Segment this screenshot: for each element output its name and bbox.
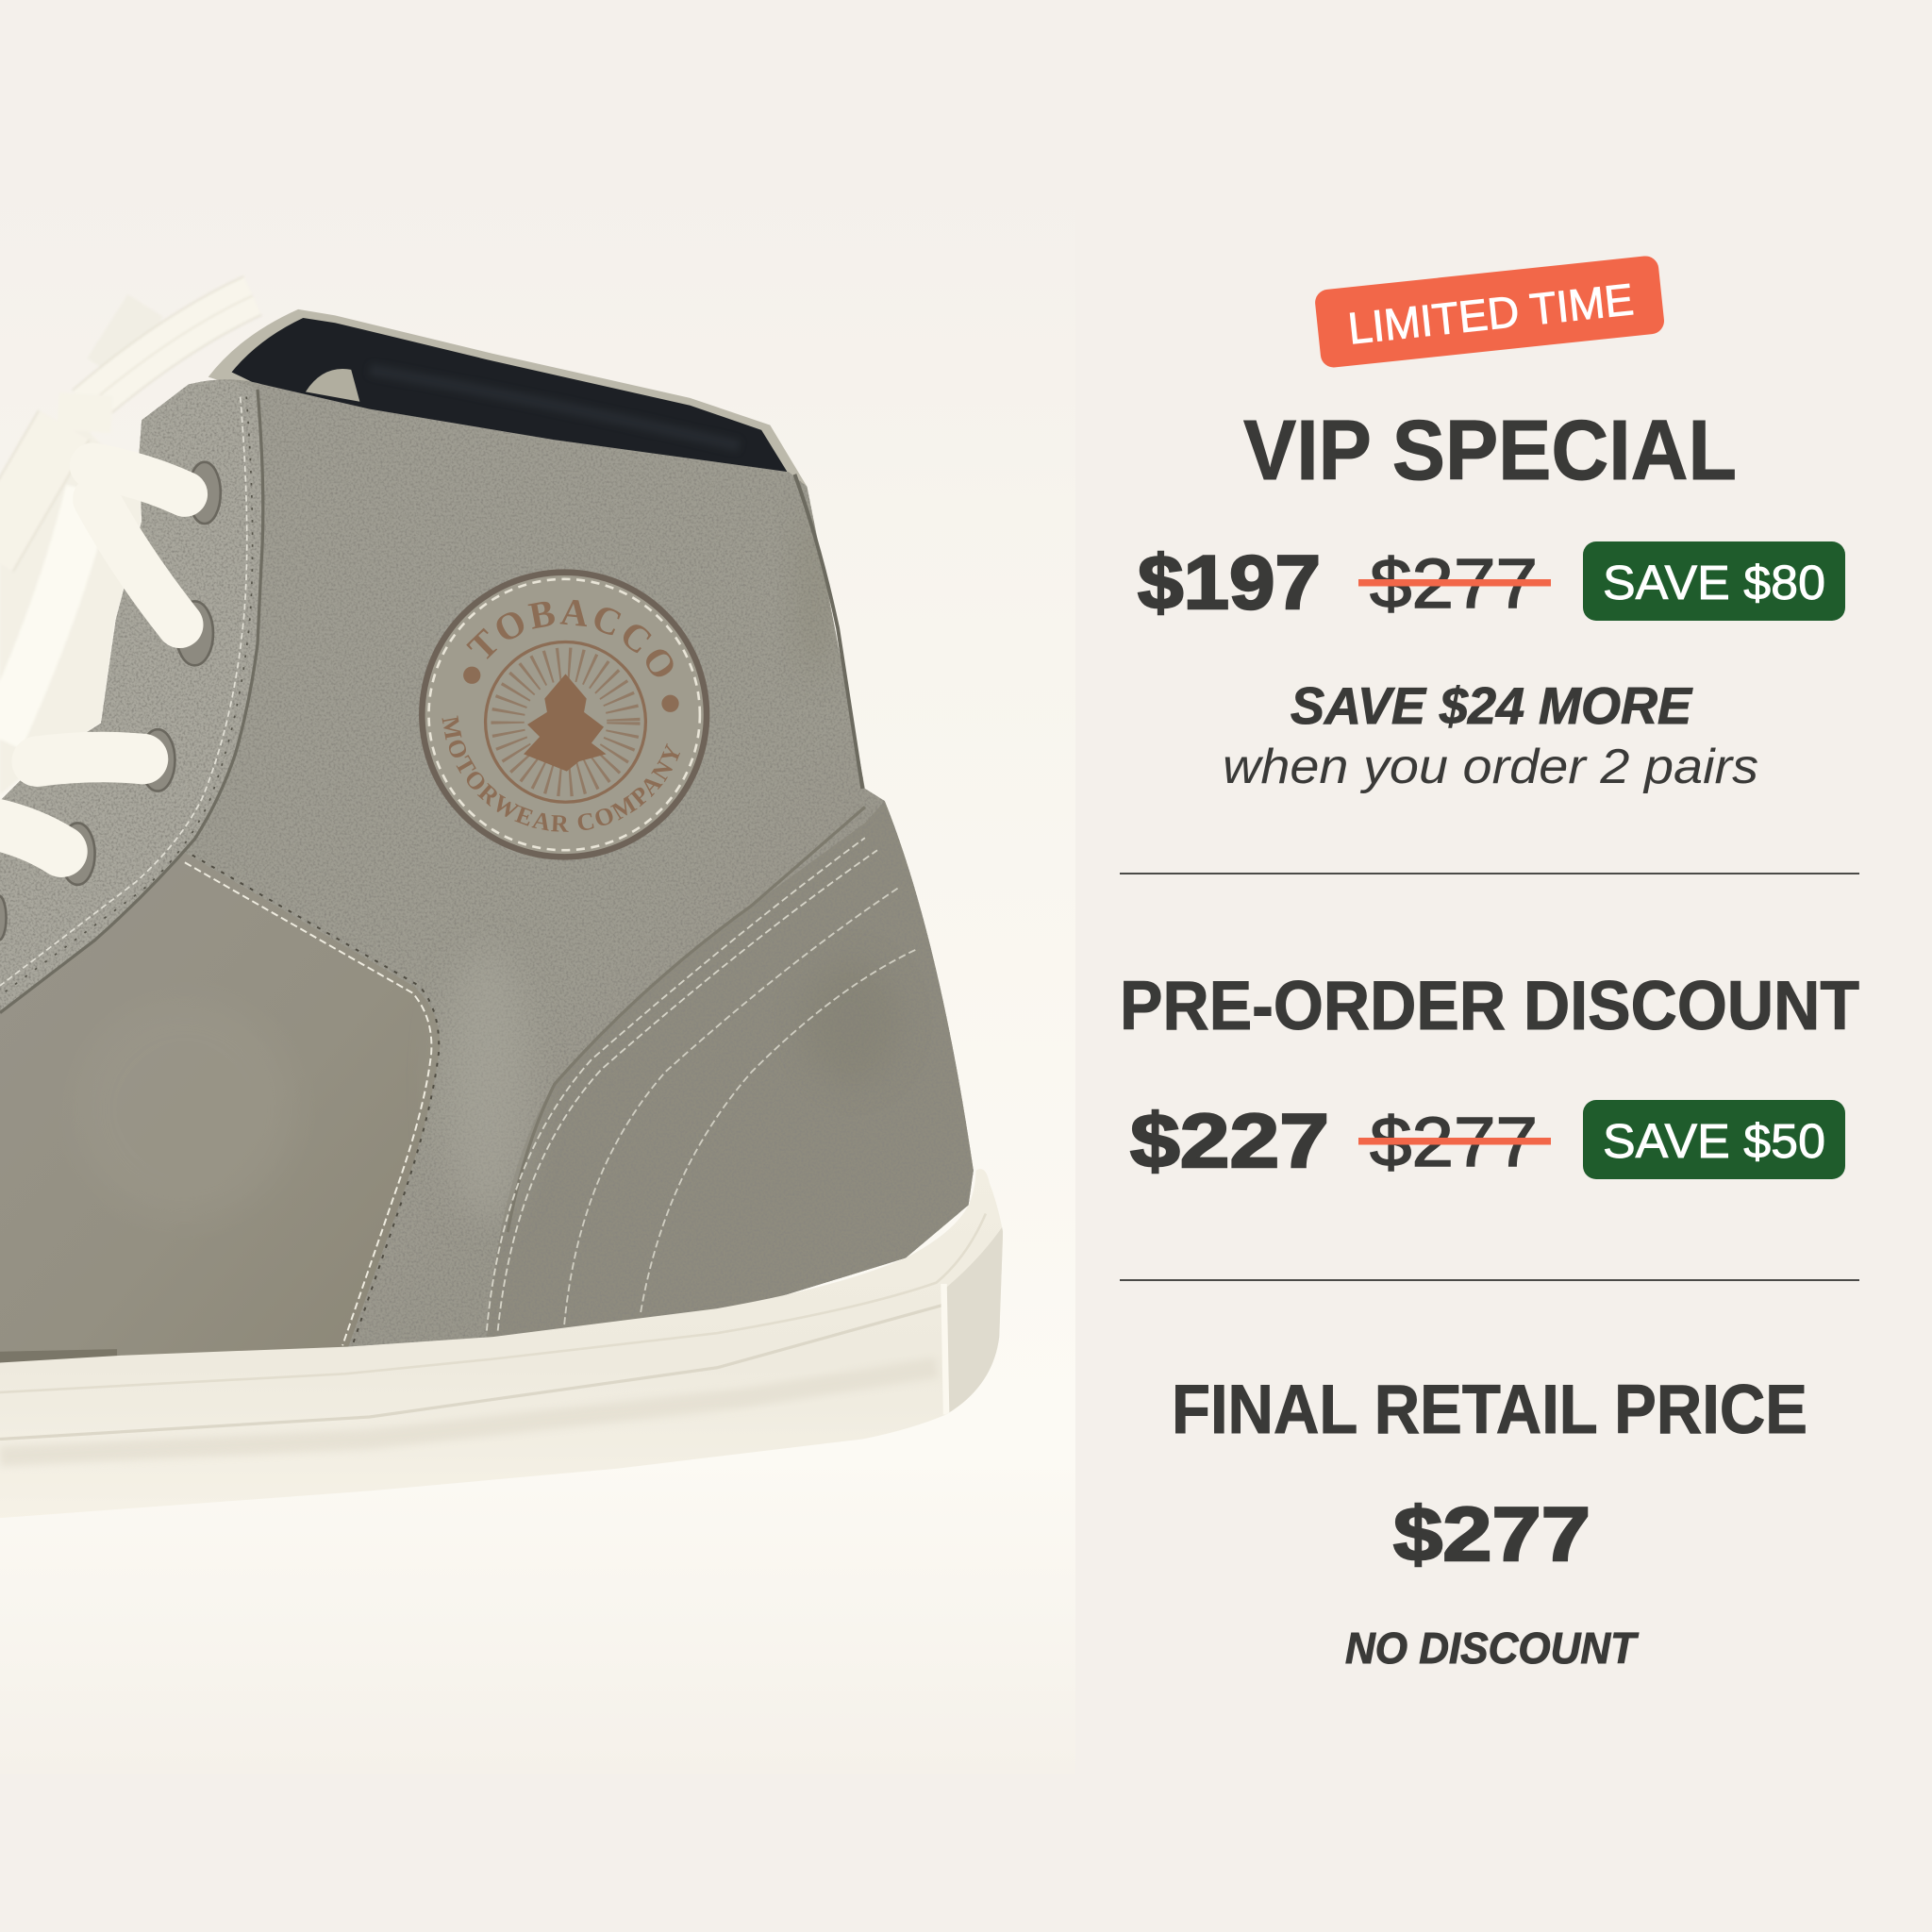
- note: multi-pair saving: SAVE $24 MORE: [1291, 676, 1693, 735]
- price: 197: $197: [1138, 541, 1321, 625]
- note: no discount: NO DISCOUNT: [1345, 1624, 1640, 1673]
- toe panel: [0, 853, 440, 1363]
- patch lettering: TOBACCO: [466, 600, 674, 677]
- eyelets: [0, 462, 221, 941]
- badge: limited time: [1314, 255, 1665, 369]
- price: 277: $277: [1393, 1492, 1591, 1577]
- laces behind the collar: [0, 295, 253, 794]
- laces through eyelets: [0, 466, 185, 852]
- old price with strike: $277: [1370, 1103, 1538, 1181]
- save 50 badge: [1583, 1100, 1845, 1179]
- tier: VIP special: [1138, 404, 1845, 794]
- heading: VIP special: VIP SPECIAL: [1243, 404, 1737, 498]
- suede upper: [0, 379, 974, 1370]
- save 80 badge: [1583, 541, 1845, 621]
- save 50 badge: SAVE $50: [1603, 1114, 1825, 1168]
- heel counter: [487, 801, 974, 1341]
- badge: limited time: LIMITED TIME: [1345, 274, 1636, 354]
- leather brand patch: [419, 569, 709, 860]
- product photo: sneaker: [0, 275, 1003, 1518]
- note: multi-pair saving: when you order 2 pairs: [1223, 740, 1758, 794]
- infographic canvas: [0, 257, 1859, 1664]
- patch lettering: MOTORWEAR COMPANY: [441, 715, 680, 832]
- photo backdrop: [0, 160, 1075, 1774]
- old price with strike: $277: [1370, 544, 1538, 623]
- heading: final retail: FINAL RETAIL PRICE: [1172, 1372, 1807, 1448]
- note: multi-pair saving: [1223, 676, 1758, 794]
- collar lining: [208, 309, 807, 487]
- price: 227: $227: [1130, 1099, 1329, 1184]
- tier: pre-order discount: [1120, 968, 1859, 1184]
- patch lettering: [441, 600, 680, 832]
- seams and stitching: [0, 390, 918, 1345]
- tier: final retail price: [1172, 1372, 1807, 1673]
- sole: [0, 1158, 1023, 1528]
- soft shading: [0, 506, 899, 1366]
- save 80 badge: SAVE $80: [1603, 556, 1825, 609]
- heading: pre-order: PRE-ORDER DISCOUNT: [1120, 968, 1859, 1044]
- eyelet panel: [0, 380, 263, 1013]
- patch emblem: [486, 641, 645, 802]
